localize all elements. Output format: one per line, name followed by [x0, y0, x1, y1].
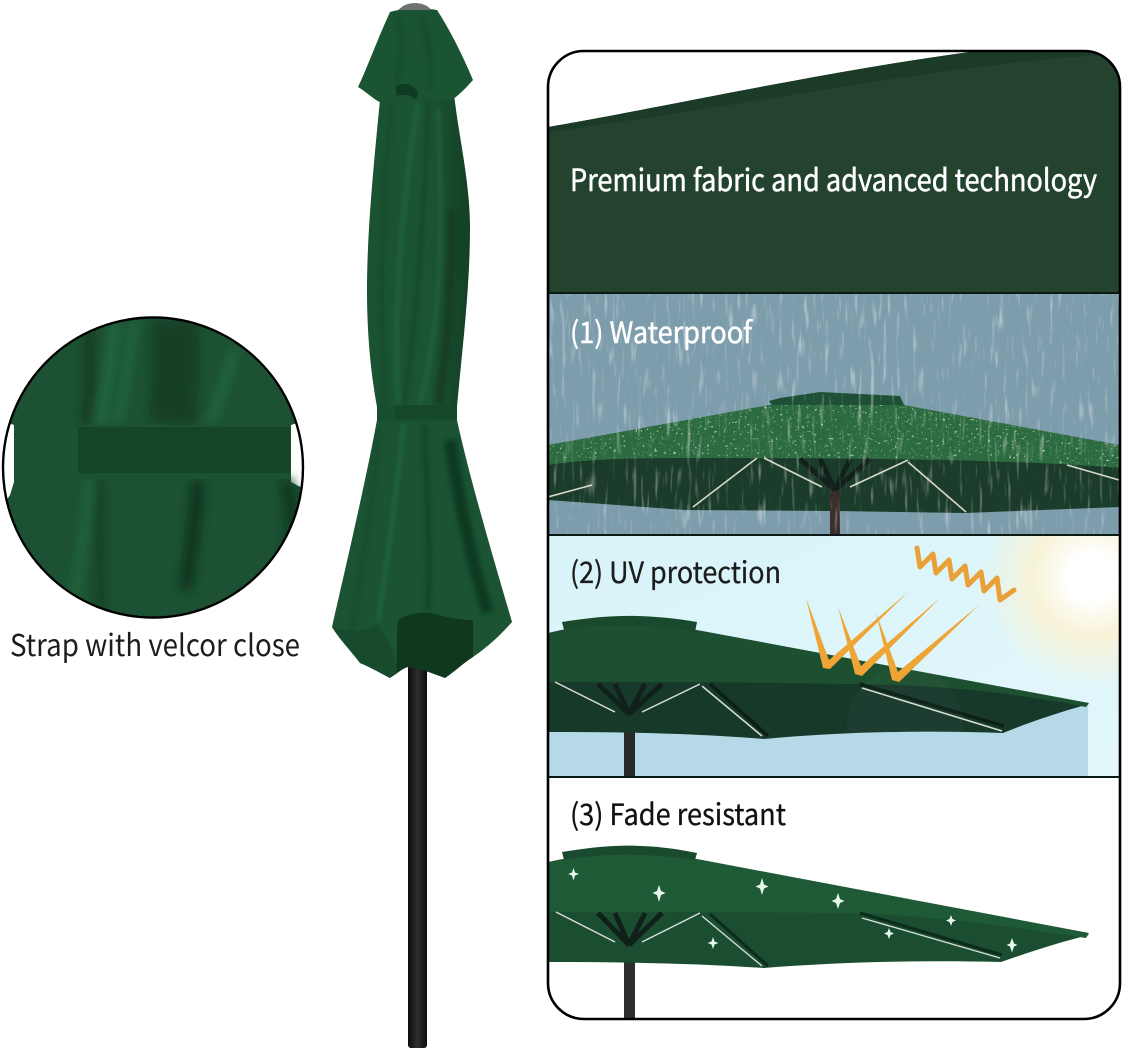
rib shadows [710, 684, 1004, 736]
label: (3) Fade resistant [570, 792, 786, 834]
features panel [547, 50, 1122, 1020]
skirt fold lines [352, 424, 488, 630]
strap detail circle [0, 316, 306, 620]
UV rays [806, 592, 979, 682]
rib shadows [710, 913, 1002, 966]
panel frame [548, 51, 1120, 1019]
canopy top [548, 854, 1089, 938]
pole [830, 490, 840, 534]
ruffle shadows [396, 14, 431, 88]
lens flare [847, 667, 963, 783]
canopy cap [562, 846, 697, 860]
folded umbrella [332, 3, 512, 1048]
hub spokes [598, 913, 662, 945]
pole [624, 962, 635, 1018]
underside [549, 912, 1089, 968]
panel dividers [548, 293, 1120, 777]
label: (1) Waterproof [570, 310, 753, 352]
strap caption: Strap with velcor close [10, 621, 300, 665]
canopy top [548, 624, 1089, 707]
strap [377, 406, 457, 421]
underside [549, 682, 1089, 739]
ribs [555, 682, 1002, 736]
hub spokes [800, 459, 870, 490]
ribs [548, 458, 1119, 512]
lower sky [549, 732, 1000, 776]
top cap [398, 3, 432, 10]
ribs [556, 912, 1000, 966]
canopy top [548, 405, 1120, 468]
canopy cap [562, 616, 697, 632]
canopy underside [549, 458, 1119, 513]
pole [624, 732, 635, 776]
panel: premium fabric [548, 52, 1122, 293]
strap tab [395, 405, 457, 419]
skirt lower fold [332, 624, 396, 678]
icon: UV wave [917, 548, 1014, 600]
body fold lines [381, 100, 452, 404]
circle outline [3, 318, 303, 618]
lower flared skirt [332, 420, 512, 678]
panel: waterproof [548, 294, 1120, 534]
panel: fade resistant [549, 800, 1089, 1018]
rain streaks [548, 294, 1120, 534]
sparkles [568, 868, 1018, 952]
circle fabric [0, 316, 306, 620]
sun glow [994, 536, 1119, 676]
skirt inner shadow [396, 613, 473, 678]
top ruffle [358, 8, 473, 103]
canopy water droplets [550, 405, 1119, 470]
panel: UV protection [548, 536, 1120, 783]
ruffle notch shadow [396, 84, 418, 100]
main fabric body [367, 80, 470, 407]
hub spokes [598, 684, 662, 714]
label: (2) UV protection [570, 550, 781, 592]
umbrella pole [408, 665, 427, 1048]
canopy cap [769, 392, 904, 405]
